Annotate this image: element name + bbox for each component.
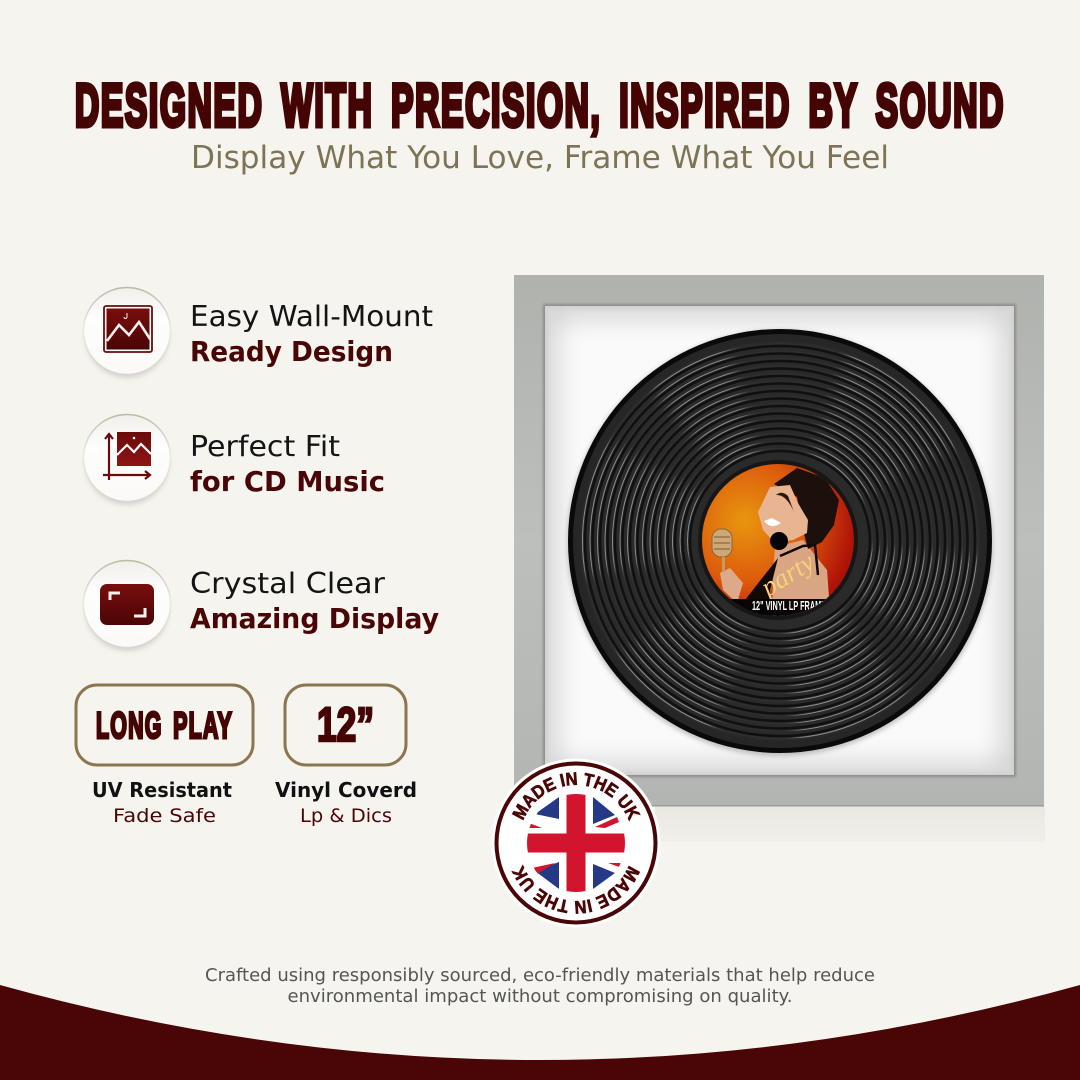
label: amazing display: Amazing Display bbox=[190, 603, 439, 635]
footer note: Crafted using responsibly sourced, eco-friendly materials that help reduce bbox=[205, 965, 875, 986]
record grooves: dark bbox=[585, 346, 975, 736]
feature: easy wall-mount bbox=[84, 288, 433, 378]
icon button: display bbox=[84, 560, 170, 651]
footer note bbox=[205, 965, 875, 1007]
label: perfect fit: Perfect Fit bbox=[190, 430, 340, 463]
picture frame bbox=[514, 275, 1044, 806]
seal text: top: MADE IN THE UK bbox=[512, 772, 641, 822]
made in the uk seal bbox=[492, 758, 660, 928]
caption: uv resistant bbox=[92, 778, 232, 827]
badge: long play bbox=[76, 685, 253, 765]
icon button: fit dimensions bbox=[84, 414, 170, 505]
label caption band bbox=[730, 599, 826, 616]
union jack bbox=[526, 793, 626, 893]
badge text: long play: LONG PLAY bbox=[96, 705, 233, 746]
frame reflection bbox=[655, 806, 1045, 842]
badge text: 12 inch: 12” bbox=[317, 699, 374, 752]
footer note: environmental impact without compromising on quality. bbox=[288, 986, 792, 1007]
microphone bbox=[712, 529, 732, 572]
caption: uv resistant: Fade Safe bbox=[113, 805, 216, 827]
spindle hole bbox=[770, 532, 788, 550]
label: for cd music: for CD Music bbox=[190, 466, 385, 498]
label: easy wall-mount: Easy Wall-Mount bbox=[190, 300, 433, 333]
caption: vinyl coverd: Lp & Dics bbox=[300, 805, 392, 827]
feature: perfect fit bbox=[84, 414, 385, 505]
record label artwork bbox=[702, 464, 854, 616]
label caption: 12" VINYL LP FRAME bbox=[752, 598, 826, 613]
icon button: wall mount bbox=[84, 288, 170, 378]
singer bbox=[720, 468, 839, 618]
caption: vinyl coverd: Vinyl Coverd bbox=[275, 778, 417, 802]
label: ready design: Ready Design bbox=[190, 336, 393, 368]
feature: crystal clear bbox=[84, 560, 439, 651]
label: crystal clear: Crystal Clear bbox=[190, 567, 385, 600]
vinyl record bbox=[567, 329, 993, 756]
caption: uv resistant: UV Resistant bbox=[92, 778, 232, 802]
party script: party bbox=[754, 546, 820, 603]
caption: vinyl coverd bbox=[275, 778, 417, 827]
record grooves: highlights bbox=[582, 344, 978, 738]
bottom dark curved band bbox=[0, 985, 1080, 1080]
badge: 12 inch bbox=[285, 685, 406, 765]
subtitle: Display What You Love, Frame What You Feel bbox=[191, 140, 889, 176]
seal text: bottom: MADE IN THE UK bbox=[511, 864, 640, 914]
